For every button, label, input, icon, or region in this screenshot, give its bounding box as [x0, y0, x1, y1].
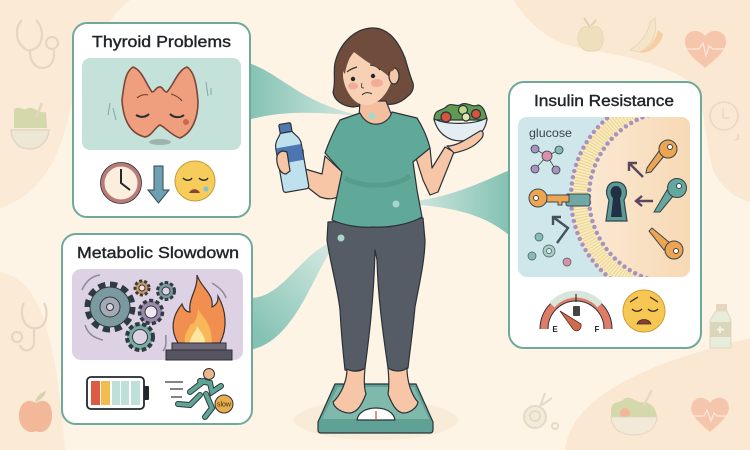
- arrows: [553, 163, 653, 243]
- icon: stethoscope top left: [17, 20, 58, 68]
- heading: Thyroid Problems: [92, 34, 231, 51]
- thyroid image panel: [82, 58, 241, 150]
- keyhole center: [611, 186, 622, 217]
- heading: Insulin Resistance: [534, 93, 674, 110]
- icon: runner: [165, 368, 221, 417]
- icon: vegetables top right: [630, 18, 663, 53]
- feet: [333, 368, 366, 413]
- icon: gears: [82, 275, 226, 351]
- panel: thyroid problems: [73, 23, 250, 217]
- connector: thyroid: [248, 63, 364, 120]
- icon: stethoscope bottom: [524, 393, 558, 429]
- icon: salad bowl left: [11, 103, 49, 149]
- label: glucose: glucose: [529, 126, 572, 140]
- slow badge: [215, 395, 233, 413]
- fringe: [343, 39, 394, 74]
- connector: metabolic: [250, 238, 341, 350]
- icon: fuel gauge: F: [595, 325, 600, 334]
- shirt: [325, 112, 430, 227]
- icon: key orange top: [646, 140, 677, 173]
- icon: key orange bottom: [649, 228, 683, 259]
- pants: [327, 218, 425, 371]
- icon: flame: [173, 275, 225, 343]
- face: [343, 52, 392, 105]
- icon: fuel gauge: [544, 294, 608, 334]
- icon: down arrow: [148, 166, 169, 203]
- icon: battery: [87, 377, 149, 409]
- icon: thyroid: [108, 67, 211, 145]
- icon: clock: [100, 162, 142, 204]
- shadow under scale: [294, 400, 458, 440]
- panel: metabolic slowdown: [62, 234, 252, 424]
- eyes and brows: [347, 65, 380, 95]
- icon: sad face: [175, 161, 215, 201]
- neck: [359, 101, 392, 127]
- ear: [389, 68, 399, 84]
- icon: glucose molecule: [531, 145, 563, 174]
- salad: [434, 104, 487, 122]
- connector: insulin: [396, 170, 510, 236]
- hand right: [447, 131, 483, 153]
- icon: tired face: [623, 290, 665, 332]
- right arm: [416, 147, 454, 195]
- slow badge: slow: [217, 402, 232, 408]
- left arm: [302, 156, 342, 199]
- scale: [318, 384, 433, 433]
- hair: [333, 28, 413, 107]
- heading: Metabolic Slowdown: [77, 245, 239, 262]
- hand left fingers: [277, 151, 290, 174]
- icon: burner: [166, 343, 232, 360]
- icon: bottle right: [710, 304, 731, 348]
- cell diagram panel: [518, 117, 690, 277]
- icon: clock right: [710, 102, 738, 140]
- icon: fuel gauge: E: [552, 325, 558, 334]
- icon: heart bottom: [690, 398, 729, 432]
- dots: [528, 233, 571, 266]
- icon: apple left: [19, 391, 52, 432]
- icon: salad bowl bottom: [611, 390, 657, 435]
- figure: woman: [272, 28, 487, 433]
- gears and flame panel: [72, 269, 243, 360]
- shirt belly fold: [345, 176, 410, 185]
- icon: key teal: [654, 178, 686, 212]
- bottle: [272, 121, 309, 193]
- cheeks: [348, 79, 383, 90]
- panel: insulin resistance: [508, 81, 702, 349]
- hand left back: [296, 150, 304, 176]
- bowl: [434, 118, 487, 141]
- icon: heart top right: [682, 31, 726, 68]
- nodes: [338, 112, 400, 242]
- scale dial: [357, 408, 395, 420]
- icon: apple top right: [578, 18, 603, 51]
- icon: key in membrane: [529, 189, 590, 207]
- icon: stethoscope lower left: [12, 303, 46, 350]
- icon: keyhole: [606, 182, 627, 221]
